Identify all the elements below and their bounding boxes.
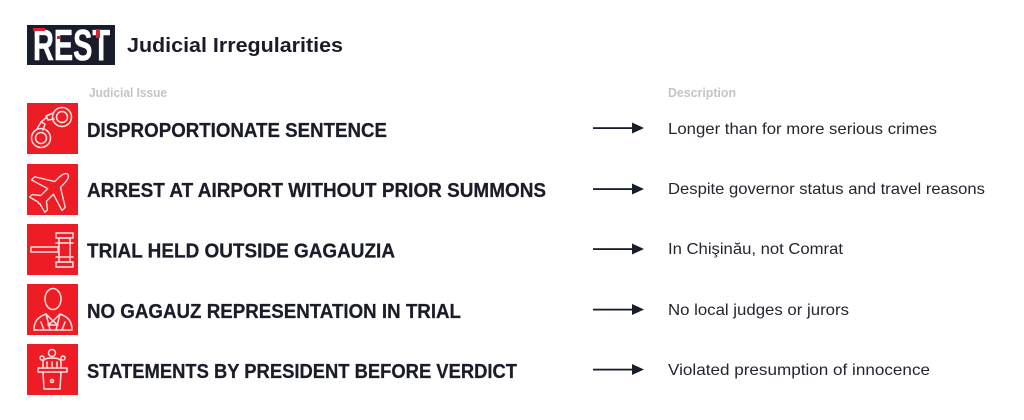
description: In Chişinău, not Comrat [668,241,844,258]
icon: gavel [27,224,78,275]
description: Despite governor status and travel reasons [668,181,985,198]
heading: NO GAGAUZ REPRESENTATION IN TRIAL [87,301,461,323]
arrow [593,304,644,315]
arrow [593,122,644,134]
column header: Judicial Issue: Judicial Issue [89,86,167,100]
description: Violated presumption of innocence [668,362,930,379]
column header: Description: Description [668,86,736,100]
arrow [593,364,644,375]
description: Longer than for more serious crimes [668,121,937,138]
row 3: trial outside Gagauzia [27,224,844,275]
title: Judicial Irregularities [127,35,343,57]
arrow [593,244,644,254]
row 5: statements by president [27,344,930,395]
icon: airplane [22,159,83,220]
row 2: arrest at airport [22,159,985,220]
icon: handcuffs [27,103,78,154]
heading: TRIAL HELD OUTSIDE GAGAUZIA [87,240,395,262]
description: No local judges or jurors [668,302,849,319]
row 4: no Gagauz representation [27,284,849,335]
row 1: disproportionate sentence [27,103,937,154]
icon: person in suit [27,284,78,335]
logo: REST [27,21,115,70]
arrow [593,184,644,194]
heading: DISPROPORTIONATE SENTENCE [87,120,387,142]
icon: speaker at podium [27,344,78,395]
logo: REST: REST [33,21,110,70]
heading: ARREST AT AIRPORT WITHOUT PRIOR SUMMONS [87,180,546,202]
heading: STATEMENTS BY PRESIDENT BEFORE VERDICT [87,361,517,383]
